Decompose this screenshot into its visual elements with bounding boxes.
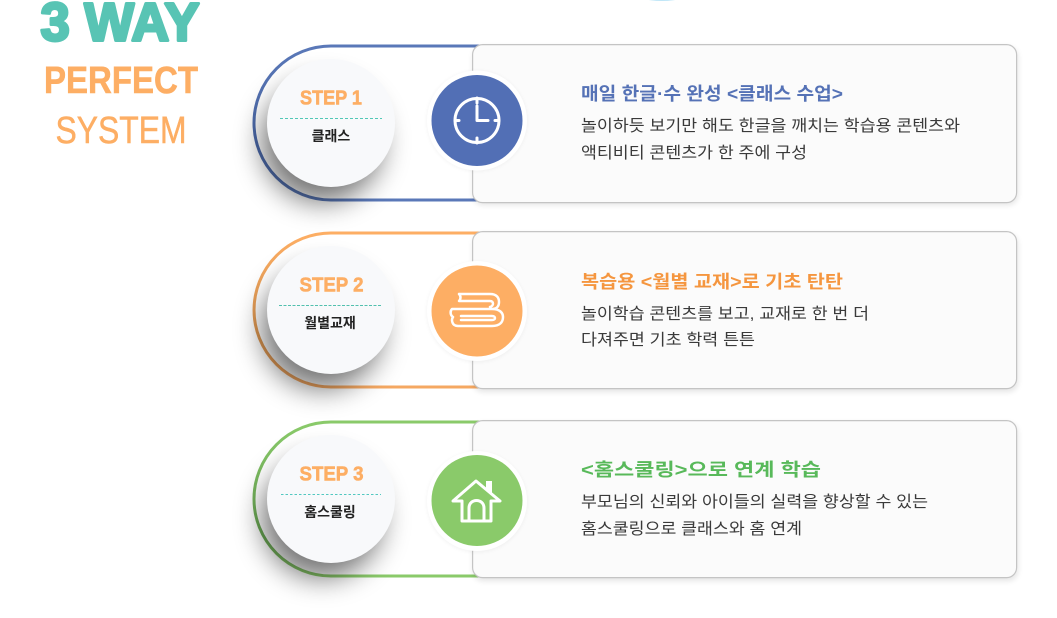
step 2 text: 복습용 <월별 교재>로 기초 탄탄 (581, 272, 843, 292)
step 2 text: 다져주면 기초 학력 튼튼 (581, 331, 755, 349)
title: 3 WAY PERFECT SYSTEM: SYSTEM (56, 110, 186, 152)
panel: step 1 (254, 45, 1018, 205)
card 1 (473, 45, 1018, 205)
title: 3 WAY PERFECT SYSTEM: PERFECT (44, 60, 198, 102)
step badge 2 (262, 246, 395, 389)
step badge 1: STEP 1 (300, 88, 362, 110)
step 3 text: 홈스쿨링으로 클래스와 홈 연계 (581, 520, 802, 538)
card 2 (473, 232, 1018, 392)
step 2 text (581, 272, 869, 349)
icon: books (427, 261, 527, 362)
card 3 (473, 421, 1018, 581)
step badge 3: 홈스쿨링 (304, 504, 356, 520)
step 1 text (581, 84, 960, 162)
panel: step 3 (254, 421, 1018, 581)
step 3 text: 부모님의 신뢰와 아이들의 실력을 향상할 수 있는 (581, 493, 928, 511)
step badge 3: STEP 3 (300, 464, 364, 486)
step badge 1: 클래스 (312, 128, 350, 144)
step badge 2: 월별교재 (304, 315, 356, 331)
step 3 text: <홈스쿨링>으로 연계 학습 (581, 460, 821, 480)
step badge 3 (262, 435, 395, 578)
pill outline 2 (254, 233, 490, 387)
step 2 text: 놀이학습 콘텐츠를 보고, 교재로 한 번 더 (581, 305, 869, 323)
icon: clock (427, 70, 527, 171)
icon: house (427, 451, 527, 552)
pill outline 1 (254, 46, 490, 200)
step 1 text: 매일 한글·수 완성 <클래스 수업> (581, 84, 843, 104)
pill outline 3 (254, 422, 490, 576)
panel: step 2 (254, 232, 1018, 392)
step 1 text: 놀이하듯 보기만 해도 한글을 깨치는 학습용 콘텐츠와 (581, 117, 960, 135)
step 1 text: 액티비티 콘텐츠가 한 주에 구성 (581, 144, 807, 162)
step 3 text (581, 460, 928, 538)
title: 3 WAY PERFECT SYSTEM (40, 0, 200, 152)
step badge 1 (262, 59, 395, 202)
decorative top arc (632, 0, 692, 1)
step badge 2: STEP 2 (300, 274, 364, 296)
